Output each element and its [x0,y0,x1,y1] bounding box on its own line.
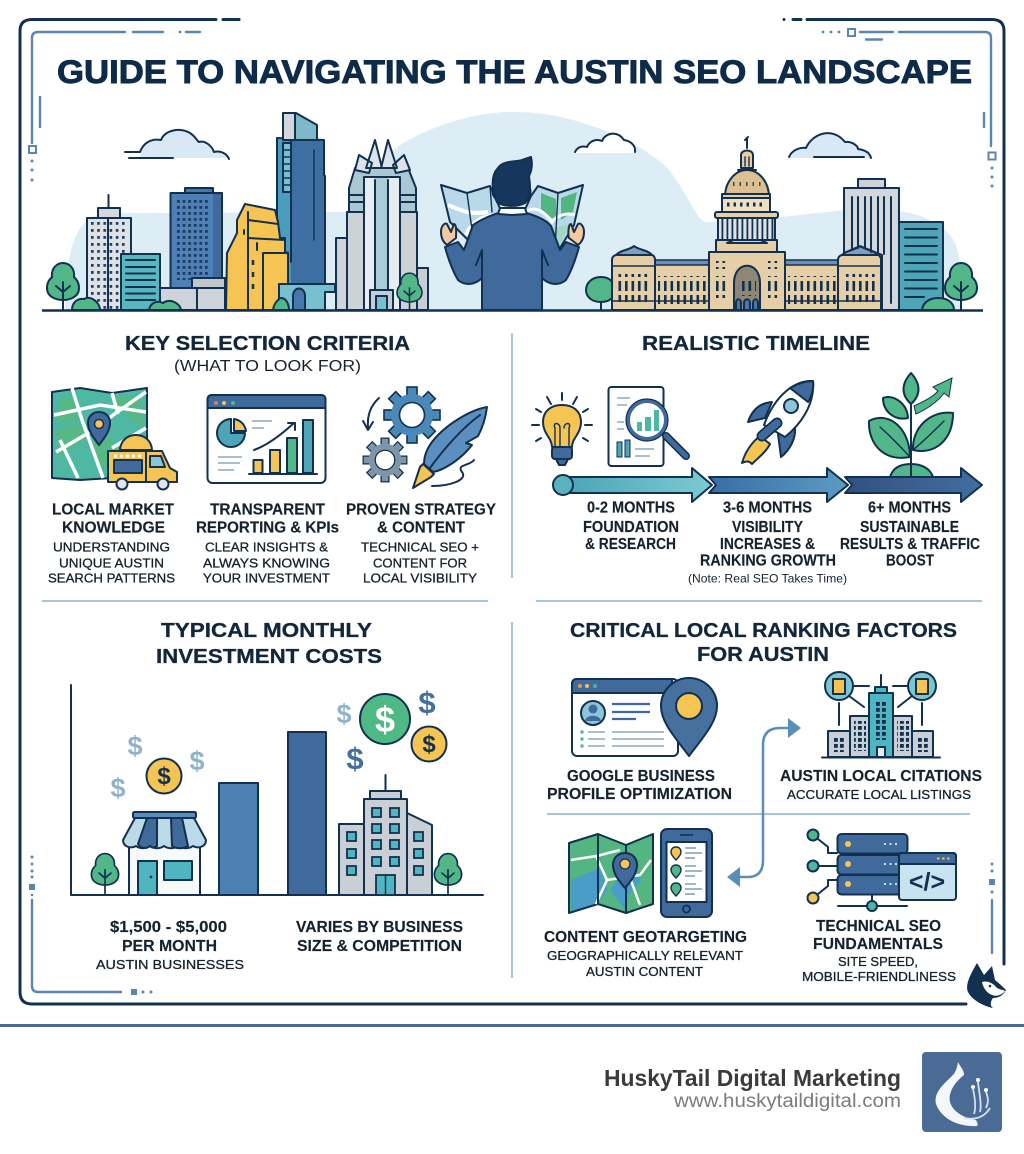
pavilions [612,255,881,310]
text: phase 2: RANKING GROWTH [700,553,836,570]
icon: light bulb [532,393,592,465]
hands [441,223,456,245]
footer brand text: www.huskytaildigital.com [673,1091,901,1112]
text: local market knowledge: SEARCH PATTERNS [48,571,175,586]
heading: ranking factors: FOR AUSTIN [697,643,829,666]
texas capitol [612,137,882,310]
tree far right [945,263,977,310]
cloud right [789,133,871,158]
teal block [121,254,160,310]
text: google business profile: GOOGLE BUSINESS [567,768,715,785]
icon: yellow coin: $ [157,763,171,790]
floating dollars small: $ [127,731,143,761]
text: price range: $1,500 - $5,000 [110,919,227,936]
icon: yellow coin large [412,726,446,762]
title: GUIDE TO NAVIGATING THE AUSTIN SEO LANDSCAPE [57,54,972,90]
text: technical seo [802,918,956,984]
yellow stepped building [226,204,288,310]
bush far right [922,298,954,310]
panel: key selection criteria [48,332,497,586]
text: phase 1: FOUNDATION [583,519,679,536]
timeline arrow 3 [845,468,982,502]
sky backdrop [65,112,960,310]
gray tower left [87,195,131,310]
low gray podium [160,278,225,310]
floating dollars large: $ [346,741,364,776]
text: transparent reporting: REPORTING & KPIs [196,520,339,537]
text: proven strategy [346,502,497,586]
text: phase 3: RESULTS & TRAFFIC [840,536,980,553]
icon: server and code window: </> [909,868,945,896]
ears [492,188,531,199]
icon: server and code window [808,830,956,911]
text: price range: AUSTIN BUSINESSES [96,957,244,972]
icon: tree right [434,854,462,894]
floating dollars small [110,731,205,803]
text: phase 3 [840,500,980,570]
text: local market knowledge: UNIQUE AUSTIN [59,556,164,571]
icon: phone with pins [661,829,712,917]
timeline start node [553,475,573,495]
text: technical seo: MOBILE-FRIENDLINESS [802,969,956,984]
heading: key selection criteria [125,332,410,375]
floating dollars small: $ [189,746,205,776]
cloud centre [575,134,635,153]
text: varies note: SIZE & COMPETITION [297,938,462,955]
chart axes [71,685,483,895]
text: content geotargeting [544,929,747,979]
map left half [441,185,503,243]
text: proven strategy: & CONTENT [377,520,466,537]
icon: reporting dashboard [208,395,326,483]
heading: realistic timeline: REALISTIC TIMELINE [642,332,870,355]
heading: key selection criteria: KEY SELECTION CRITERIA [125,332,410,355]
heading: ranking factors [570,619,957,666]
text: phase 2: (Note: Real SEO Takes Time) [688,572,847,586]
text: content geotargeting: GEOGRAPHICALLY RELEVANT [547,948,743,963]
arm folds [476,250,548,278]
icon: growing plant [869,373,953,477]
heading: monthly costs: TYPICAL MONTHLY [161,619,372,642]
head and hair [493,157,532,206]
icon: citation network city [822,672,940,758]
floating dollars small: $ [110,773,126,803]
footer brand text: HuskyTail Digital Marketing [604,1065,901,1091]
central arch [734,266,760,310]
text: local citations: AUSTIN LOCAL CITATIONS [780,768,982,785]
icon: green coin: $ [375,699,395,740]
floating dollars large [336,685,436,776]
icon: city map with food truck [52,388,177,490]
tall blue skyscraper [277,113,325,310]
icon: geotargeting map [569,834,653,913]
text: varies note [296,919,463,955]
trees and bushes [47,263,615,310]
bar: small business [219,783,258,895]
text: proven strategy: CONTENT FOR [373,556,467,571]
text: phase 2 [688,500,847,586]
text: phase 2: INCREASES & [720,536,815,553]
logo badge [922,1052,1002,1132]
heading: monthly costs: INVESTMENT COSTS [156,645,382,668]
text: local market knowledge [48,502,175,586]
ground line [42,309,983,312]
icon: rocket [742,381,813,464]
heading: ranking factors: CRITICAL LOCAL RANKING FACTORS [570,619,957,642]
skyline illustration [42,112,983,310]
floating dollars large: $ [418,685,436,720]
text: phase 1: & RESEARCH [585,536,676,553]
text: transparent reporting: YOUR INVESTMENT [203,571,330,586]
text: proven strategy: LOCAL VISIBILITY [363,571,477,586]
text: google business profile [547,768,732,803]
drum with columns [718,218,775,240]
text: local citations: ACCURATE LOCAL LISTINGS [787,787,971,802]
icon: yellow coin large: $ [422,731,436,758]
blue tower [170,188,222,289]
teal arch podium [279,284,335,310]
icon: green coin [360,694,410,744]
floating dollars large: $ [336,699,352,729]
collar [498,208,527,215]
person holding map [441,157,584,310]
teal tower right [899,222,943,310]
dome [725,170,769,197]
text: transparent reporting: TRANSPARENT [210,502,326,519]
icon: business profile and pin [572,678,717,756]
text: price range [96,919,244,972]
text: transparent reporting: ALWAYS KNOWING [203,556,330,571]
text: local market knowledge: KNOWLEDGE [62,520,165,537]
icon: tree left [91,854,119,894]
text: content geotargeting: AUSTIN CONTENT [586,964,703,979]
icon: yellow coin [146,758,182,794]
text: transparent reporting [196,502,339,586]
frost bank tower [336,140,428,310]
timeline arrow 2 [709,468,848,502]
text: proven strategy: TECHNICAL SEO + [361,540,479,555]
text: content geotargeting: CONTENT GEOTARGETING [544,929,747,946]
timeline arrow 1 [563,468,712,502]
icon: report with magnifier [608,387,686,466]
text: phase 3: 6+ MONTHS [868,500,951,517]
text: price range: PER MONTH [122,938,217,955]
text: varies note: VARIES BY BUSINESS [296,919,463,936]
icon: husky mascot [967,963,1006,1008]
gray tower right [844,179,899,310]
panel: ranking factors [544,619,982,984]
text: phase 3: SUSTAINABLE [860,519,959,536]
text: technical seo: SITE SPEED, [838,954,918,969]
suit [445,212,579,310]
map right half [523,185,583,253]
icon: gears and quill [363,387,487,488]
text: proven strategy: PROVEN STRATEGY [346,502,497,519]
cloud left [125,130,229,159]
text: transparent reporting: CLEAR INSIGHTS & [205,540,328,555]
lantern and statue [738,150,756,170]
text: technical seo: FUNDAMENTALS [813,936,943,953]
text: technical seo: TECHNICAL SEO [816,918,941,935]
text: local market knowledge: UNDERSTANDING [53,540,170,555]
icon: office building [339,775,432,895]
central block [709,252,785,310]
heading: monthly costs [156,619,382,668]
connector arrow between factors [727,718,801,887]
footer rule [0,1024,1024,1027]
footer brand text [604,1065,901,1112]
text: phase 2: VISIBILITY [732,519,804,536]
heading: key selection criteria: (WHAT TO LOOK FOR) [174,358,361,375]
text: local citations [780,768,982,802]
panel: monthly investment costs [71,619,483,972]
text: phase 1: 0-2 MONTHS [587,500,675,517]
text: google business profile: PROFILE OPTIMIZATION [547,786,732,803]
bar: larger business [288,732,326,895]
text: local market knowledge: LOCAL MARKET [52,502,175,519]
text: phase 3: BOOST [886,553,934,570]
icon: small storefront [123,812,206,895]
section dividers [42,333,982,978]
inner divider [547,813,970,815]
text: phase 1 [583,500,679,553]
panel: realistic timeline [532,332,982,586]
text: phase 2: 3-6 MONTHS [723,500,812,517]
